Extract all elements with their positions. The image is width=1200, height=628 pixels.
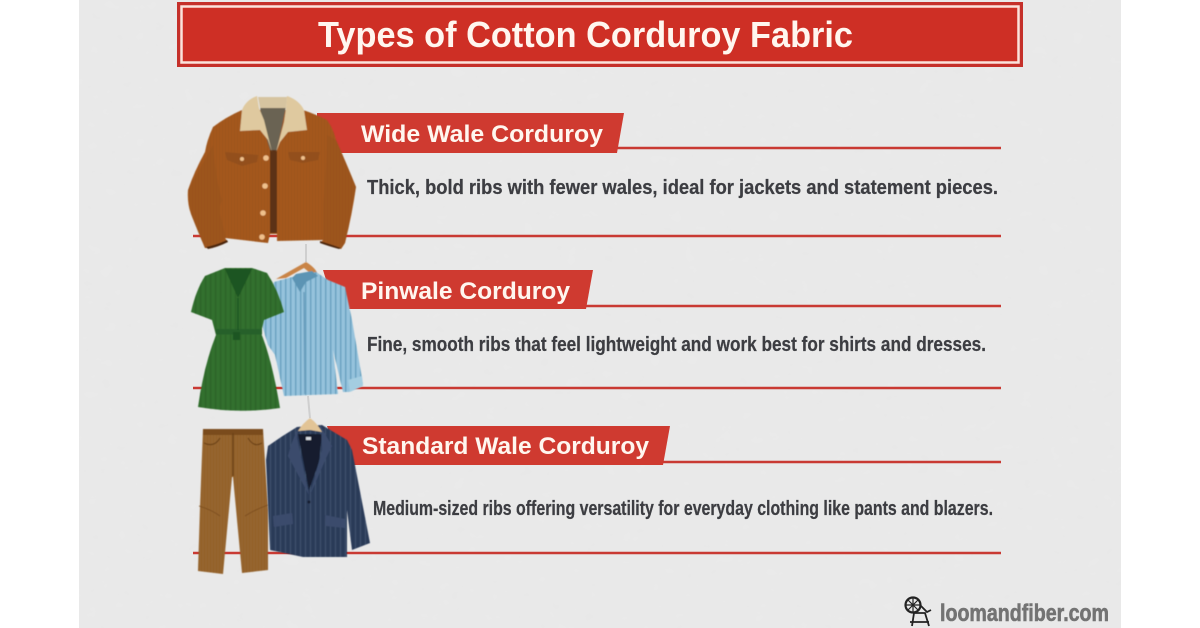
- section rules: [193, 148, 1001, 553]
- heading ribbon: standard wale: Standard Wale Corduroy: [362, 433, 650, 460]
- heading ribbon: pinwale: [323, 270, 593, 309]
- panel: wide wale corduroy: [188, 96, 998, 249]
- icon: green dress: [191, 268, 284, 411]
- title: Types of Cotton Corduroy Fabric: [318, 14, 853, 55]
- heading ribbon: pinwale: Pinwale Corduroy: [361, 278, 571, 305]
- panel: standard wale corduroy: [198, 418, 993, 574]
- icon: brown corduroy pants: [198, 429, 268, 574]
- icon: navy pinstripe blazer on hanger: [266, 418, 370, 557]
- icon: spinning wheel: [906, 598, 931, 626]
- description: pinwale: Fine, smooth ribs that feel lightweight and work best for shirts and dresses.: [367, 334, 986, 356]
- heading ribbon: wide wale: Wide Wale Corduroy: [361, 121, 604, 148]
- panel: pinwale corduroy: [191, 262, 986, 411]
- hanger hooks: [306, 244, 310, 418]
- jacket buttons: [240, 155, 305, 240]
- title banner: [177, 2, 1023, 67]
- description: wide wale: Thick, bold ribs with fewer wales, ideal for jackets and statement pieces.: [367, 177, 998, 199]
- brand logo: loomandfiber.com: [906, 598, 1109, 627]
- icon: striped blue shirt on hanger: [261, 262, 363, 396]
- heading ribbon: wide wale: [317, 113, 624, 153]
- description: standard wale: Medium-sized ribs offering versatility for everyday clothing like pants and blazers.: [373, 498, 993, 520]
- brand name: loomandfiber.com: [940, 600, 1109, 627]
- icon: corduroy jacket with shearling collar: [188, 96, 356, 249]
- heading ribbon: standard wale: [327, 426, 670, 465]
